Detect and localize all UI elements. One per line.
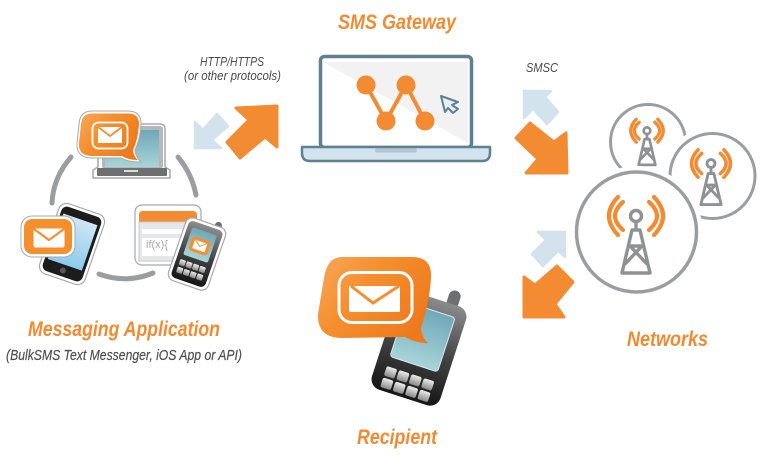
arrow: light blue to networks xyxy=(532,232,565,266)
tower: large front xyxy=(570,166,702,298)
device: code window with feature phone: if(x){ xyxy=(146,239,168,251)
tower: small back xyxy=(610,104,686,180)
phone xyxy=(369,274,474,409)
heading: Recipient: Recipient xyxy=(357,426,438,449)
device: laptop with message xyxy=(77,111,170,178)
arrow: light blue to SMS gateway xyxy=(524,91,558,124)
icon: recipient phone and message xyxy=(318,257,474,409)
icon: networks towers xyxy=(570,104,762,298)
subtitle: messaging application examples: (BulkSMS Text Messenger, iOS App or API) xyxy=(6,348,242,364)
icon: SMS gateway laptop xyxy=(302,56,490,161)
tower: right back xyxy=(664,127,762,225)
label: HTTP/HTTPS protocols xyxy=(184,54,281,83)
arrow: orange to recipient xyxy=(524,266,573,317)
heading: Networks: Networks xyxy=(627,328,708,351)
icon: cursor xyxy=(441,96,458,113)
device: code window with feature phone xyxy=(135,205,229,292)
label: HTTP/HTTPS protocols: (or other protocols) xyxy=(184,68,281,83)
arrow: light blue to messaging application xyxy=(195,114,228,148)
label: HTTP/HTTPS protocols: HTTP/HTTPS xyxy=(200,54,264,69)
arrow: orange to SMS gateway xyxy=(227,106,277,158)
logo: connected orange nodes xyxy=(356,76,434,130)
icon: messaging application cycle xyxy=(21,111,229,292)
speech bubble with envelope xyxy=(318,257,431,343)
title: SMS Gateway: SMS Gateway xyxy=(338,11,457,34)
heading: Messaging Application: Messaging Application xyxy=(28,318,220,341)
label: SMSC: SMSC xyxy=(526,60,559,75)
cycle arcs xyxy=(52,157,196,279)
device: smartphone with message xyxy=(21,201,107,287)
arrow: orange to networks xyxy=(516,123,567,173)
